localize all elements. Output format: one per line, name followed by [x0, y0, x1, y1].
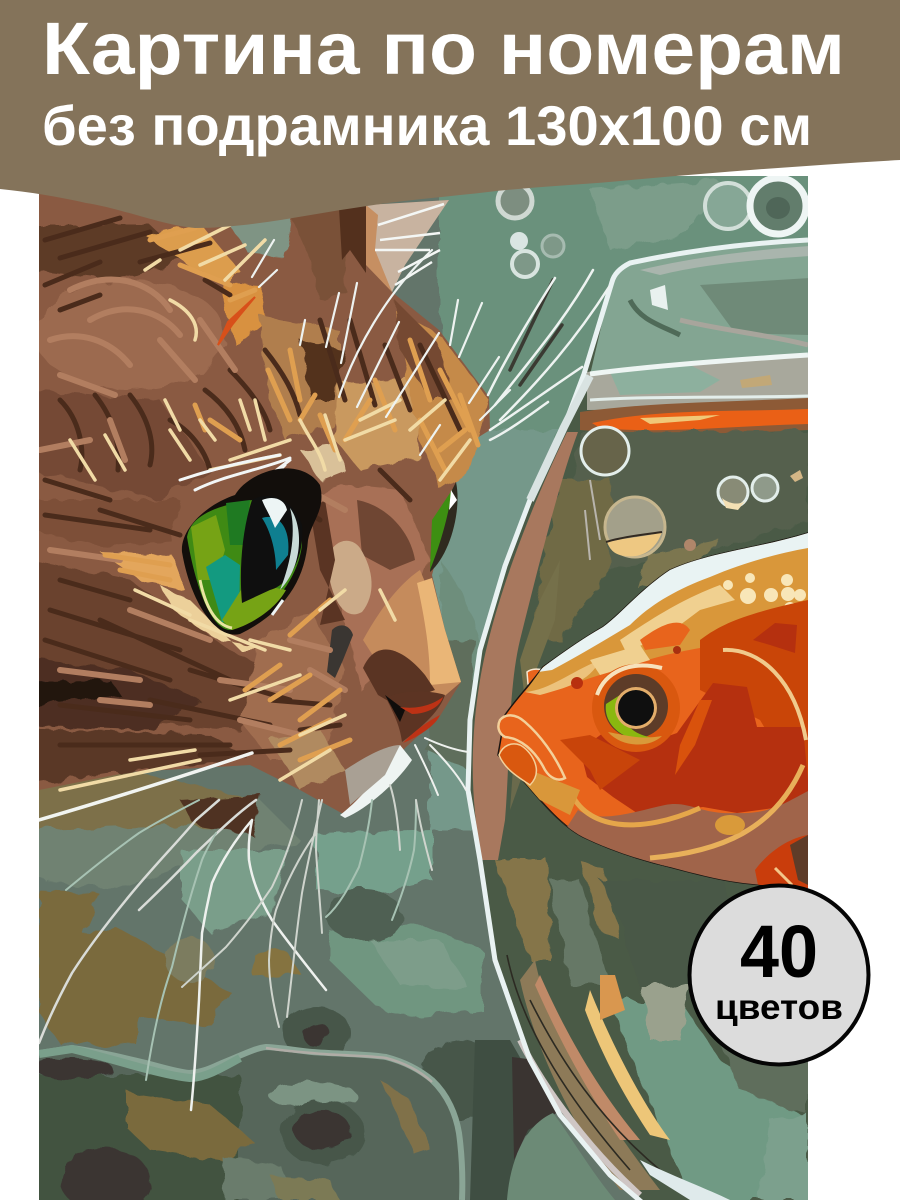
cat muzzle white [340, 745, 412, 818]
glass lower streaks [520, 960, 660, 1190]
eyebrow white hairs [180, 455, 290, 490]
red streak on forehead [218, 297, 255, 345]
goldfish [498, 530, 810, 900]
cat fur tones [30, 205, 489, 790]
water line orange [580, 398, 808, 434]
painting: cat and goldfish [20, 160, 820, 1200]
glass interior tones [495, 430, 808, 1200]
fish small fin [526, 668, 541, 685]
bubbles [498, 178, 806, 557]
fish lips [498, 715, 565, 780]
ear tuft white hairs [375, 204, 444, 285]
badge: 40 colours: цветов [715, 988, 843, 1027]
fur strokes: dark [45, 218, 460, 755]
cat head [30, 180, 510, 818]
fur strokes: cream [60, 225, 470, 790]
fish scale spots [723, 573, 806, 606]
glass bowl [468, 238, 810, 1200]
fur strokes: orange [105, 228, 478, 760]
whiskers [39, 270, 609, 1110]
fish white highlight band [538, 530, 808, 672]
badge: 40 colours: 40 [740, 910, 818, 993]
right whiskers [510, 280, 562, 385]
cat eye: green [182, 468, 321, 635]
fish belly [567, 791, 808, 885]
fish pectoral fin [755, 835, 808, 888]
brown header banner [0, 0, 900, 228]
cat far eye [430, 482, 458, 572]
badge: 40 colours [690, 886, 868, 1064]
fish eye [592, 664, 680, 752]
glass upper chamber [590, 238, 810, 375]
title: Картина по номерам [42, 7, 845, 90]
glass water band [587, 354, 808, 410]
head guard hairs [252, 240, 510, 455]
fur strokes: light brown [40, 280, 345, 735]
nose bridge [357, 500, 415, 570]
fish red cheek [580, 683, 810, 813]
glass wall reflections [473, 432, 578, 860]
dark gap and sphere beyond bowl [470, 1040, 615, 1200]
fish back scales [525, 533, 808, 692]
fish orange shoulder [700, 600, 808, 800]
glass outer contour [468, 240, 808, 1200]
cheek patch [327, 541, 372, 614]
ear [339, 205, 366, 273]
cat nose [385, 692, 445, 743]
main white whiskers [39, 753, 252, 820]
painting background [20, 160, 820, 1200]
lower foreground leaf shape [30, 1047, 462, 1200]
subtitle: без подрамника 130х100 см [42, 94, 812, 157]
bubble ring group [498, 178, 806, 557]
